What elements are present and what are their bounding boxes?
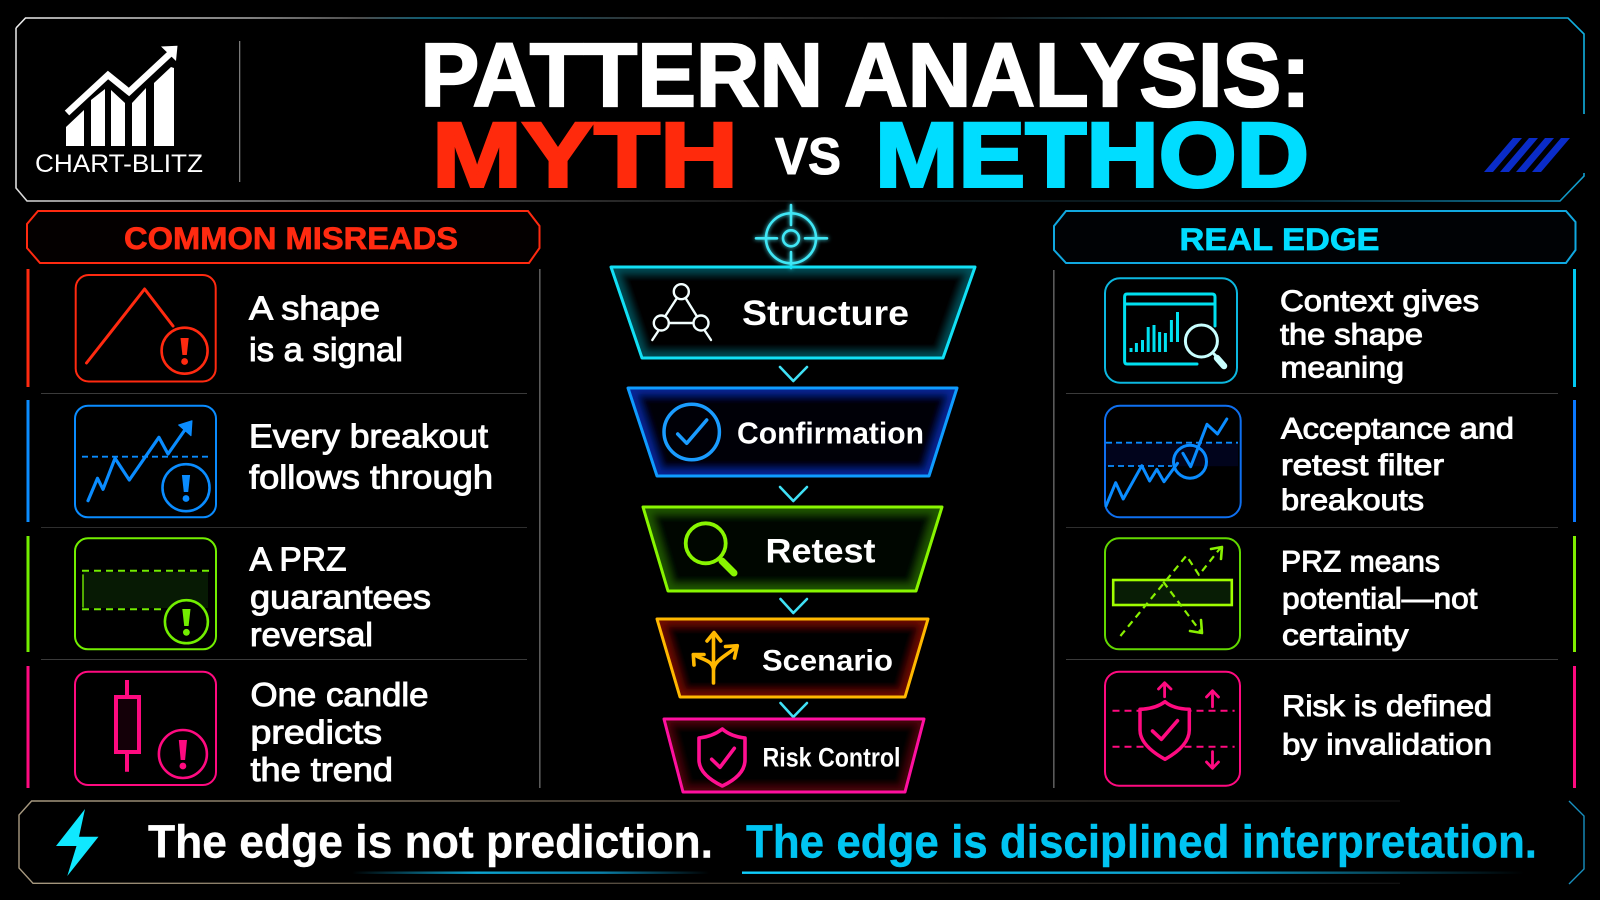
label: structure: Structure (742, 294, 909, 333)
icon: target reticle (756, 205, 827, 268)
text: acceptance and retest filter breakouts: Acceptance and (1281, 412, 1514, 445)
panel heading: common misreads (27, 211, 540, 263)
title line 1: PATTERN ANALYSIS: (420, 26, 1310, 126)
icon: PRZ potential paths (1105, 538, 1240, 649)
funnel (611, 267, 975, 792)
panel: real edge (1053, 269, 1576, 788)
title word: MYTH: MYTH (432, 104, 738, 206)
icon: breakout misread (75, 406, 216, 517)
decorative slashes (1484, 138, 1570, 172)
footer banner (19, 801, 1584, 884)
title word: VS: VS (775, 128, 841, 186)
funnel step: risk control (664, 719, 924, 792)
text: a PRZ guarantees reversal: A PRZ (250, 541, 346, 578)
text: every breakout follows through: follows through (249, 459, 493, 496)
header divider (239, 41, 240, 182)
text: one candle predicts the trend: One candle (250, 676, 428, 713)
funnel step: scenario (657, 619, 928, 697)
text: risk is defined by invalidation: by invalidation (1282, 728, 1492, 761)
logo: CHART-BLITZ (35, 46, 203, 178)
text: a shape is a signal: A shape (249, 290, 380, 326)
icon: risk shield (1105, 672, 1240, 786)
text: context gives the shape meaning: Context gives (1280, 285, 1479, 318)
text: context gives the shape meaning: the shape (1280, 318, 1423, 351)
header frame (16, 18, 1584, 201)
text: acceptance and retest filter breakouts: breakouts (1281, 484, 1424, 517)
title (420, 26, 1310, 206)
funnel step: retest (643, 507, 942, 591)
text: context gives the shape meaning: meaning (1280, 352, 1404, 385)
footer statement: interpretation: The edge is disciplined interpretation. (746, 815, 1537, 867)
text: PRZ means potential not certainty: certainty (1282, 619, 1408, 652)
text: one candle predicts the trend (250, 676, 428, 788)
text: acceptance and retest filter breakouts (1281, 412, 1514, 517)
panel heading: common misreads: COMMON MISREADS (124, 220, 458, 256)
panel heading: real edge (1054, 211, 1576, 263)
icon: acceptance and retest (1105, 406, 1241, 517)
icon: magnifier (686, 523, 734, 573)
arrow (780, 599, 807, 613)
funnel step: confirmation (628, 388, 957, 476)
icon: PRZ misread (75, 538, 216, 649)
icon: shape misread (76, 275, 216, 382)
text: a PRZ guarantees reversal: guarantees (250, 578, 431, 615)
logo wordmark: CHART-BLITZ (35, 150, 203, 178)
text: PRZ means potential not certainty: PRZ means (1281, 546, 1440, 578)
icon: check circle (664, 404, 719, 460)
text: a shape is a signal: is a signal (249, 331, 403, 368)
icon: structure nodes (652, 284, 711, 340)
icon: lightning bolt (56, 809, 98, 876)
icon: shield check (699, 729, 745, 786)
text: PRZ means potential not certainty (1281, 546, 1478, 652)
label: retest: Retest (766, 532, 876, 570)
footer statement: prediction: The edge is not prediction. (148, 815, 713, 867)
text: acceptance and retest filter breakouts: retest filter (1281, 449, 1444, 482)
label: confirmation: Confirmation (737, 416, 924, 450)
arrow (780, 703, 807, 717)
text: one candle predicts the trend: the trend (250, 751, 393, 788)
text: risk is defined by invalidation (1282, 690, 1492, 761)
text: PRZ means potential not certainty: potential—not (1282, 582, 1478, 616)
text: context gives the shape meaning (1280, 285, 1479, 385)
label: risk control: Risk Control (762, 742, 900, 772)
panel heading: real edge: REAL EDGE (1180, 221, 1380, 257)
arrow (780, 487, 807, 501)
text: every breakout follows through (249, 418, 493, 496)
title word: METHOD: METHOD (875, 104, 1309, 206)
text: a PRZ guarantees reversal (250, 541, 431, 653)
text: every breakout follows through: Every breakout (249, 418, 488, 455)
text: one candle predicts the trend: predicts (250, 714, 382, 751)
text: a shape is a signal (249, 290, 403, 368)
panel: common misreads (26, 269, 541, 788)
icon: branching arrows (693, 632, 737, 683)
text: a PRZ guarantees reversal: reversal (250, 616, 373, 653)
icon: context window (1105, 278, 1237, 383)
label: scenario: Scenario (762, 644, 893, 678)
text: risk is defined by invalidation: Risk is defined (1282, 690, 1492, 723)
icon: candle misread (75, 672, 216, 785)
arrow (780, 367, 807, 381)
icon: rising bar chart with arrow (66, 46, 178, 146)
funnel step: structure (611, 267, 975, 358)
